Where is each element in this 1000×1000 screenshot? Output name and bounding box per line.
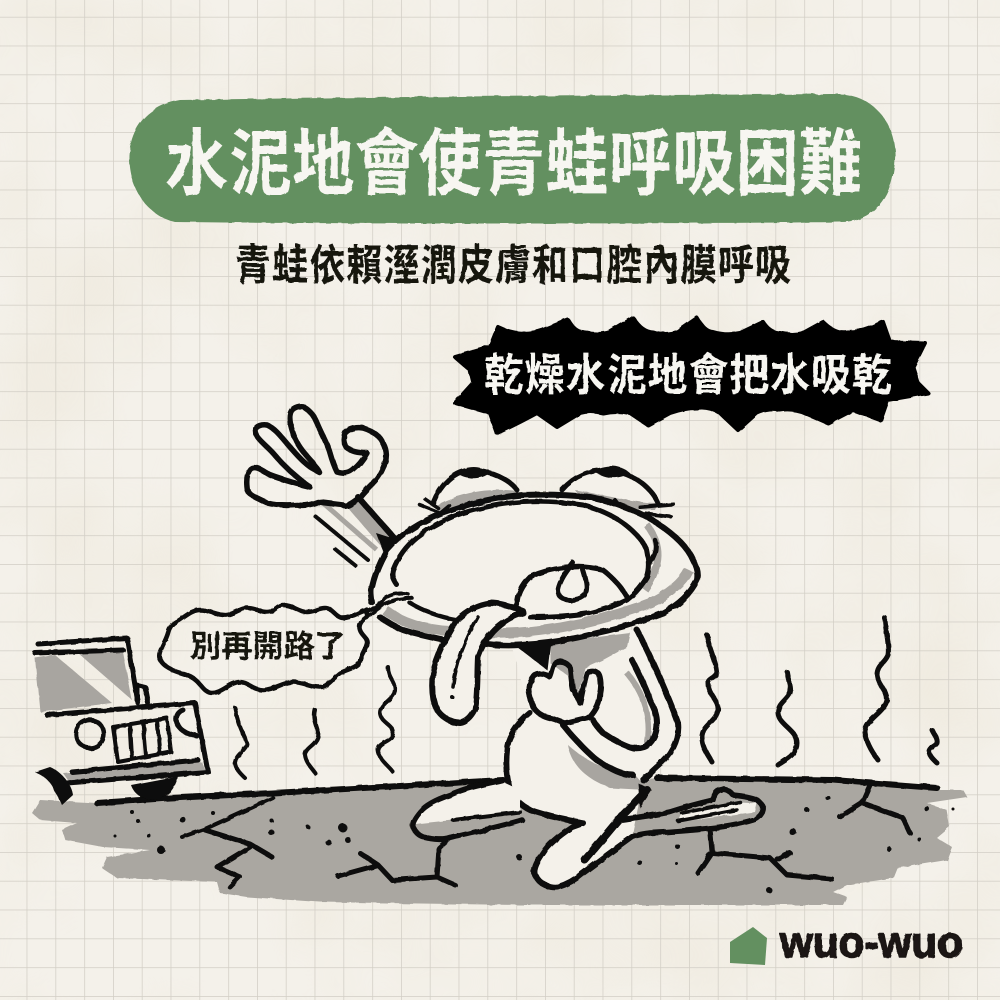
callout burst	[455, 318, 928, 433]
frog hand	[247, 406, 386, 506]
bubble text: 別再開路了	[190, 629, 346, 664]
rear wheel	[35, 767, 73, 805]
frog body	[506, 630, 678, 887]
logo	[730, 918, 963, 967]
frog character	[247, 406, 763, 887]
speech bubble	[159, 605, 367, 693]
grille	[113, 718, 171, 762]
frog hand on chest	[529, 662, 601, 723]
title banner	[129, 94, 895, 224]
headlight	[76, 720, 104, 748]
frog raised arm	[315, 497, 398, 566]
car body outline	[35, 638, 208, 783]
front wheel	[131, 776, 178, 800]
ground speckles	[114, 796, 954, 893]
left foot	[413, 780, 522, 839]
callout text: 乾燥水泥地會把水吸乾	[484, 350, 892, 399]
subtitle: 青蛙依賴溼潤皮膚和口腔內膜呼吸	[235, 242, 791, 290]
ground top edge line	[97, 778, 937, 803]
cracks in ground	[182, 785, 910, 887]
frog head and wide open mouth	[371, 495, 697, 645]
title text: 水泥地會使青蛙呼吸困難	[165, 125, 862, 205]
frog throat and uvula	[517, 563, 627, 605]
speech bubble tail into mouth	[365, 593, 412, 618]
windshield glass	[35, 652, 132, 712]
right foot	[620, 789, 763, 837]
right eye	[562, 466, 673, 517]
ground: cracked cement	[32, 778, 967, 905]
car	[35, 638, 208, 805]
brand name: wuo-wuo	[779, 918, 963, 967]
frog bent arm	[593, 660, 657, 748]
left eye	[420, 467, 518, 515]
frog tongue	[432, 603, 523, 723]
icon: green house	[730, 927, 767, 965]
heat waves rising from ground	[235, 618, 937, 778]
